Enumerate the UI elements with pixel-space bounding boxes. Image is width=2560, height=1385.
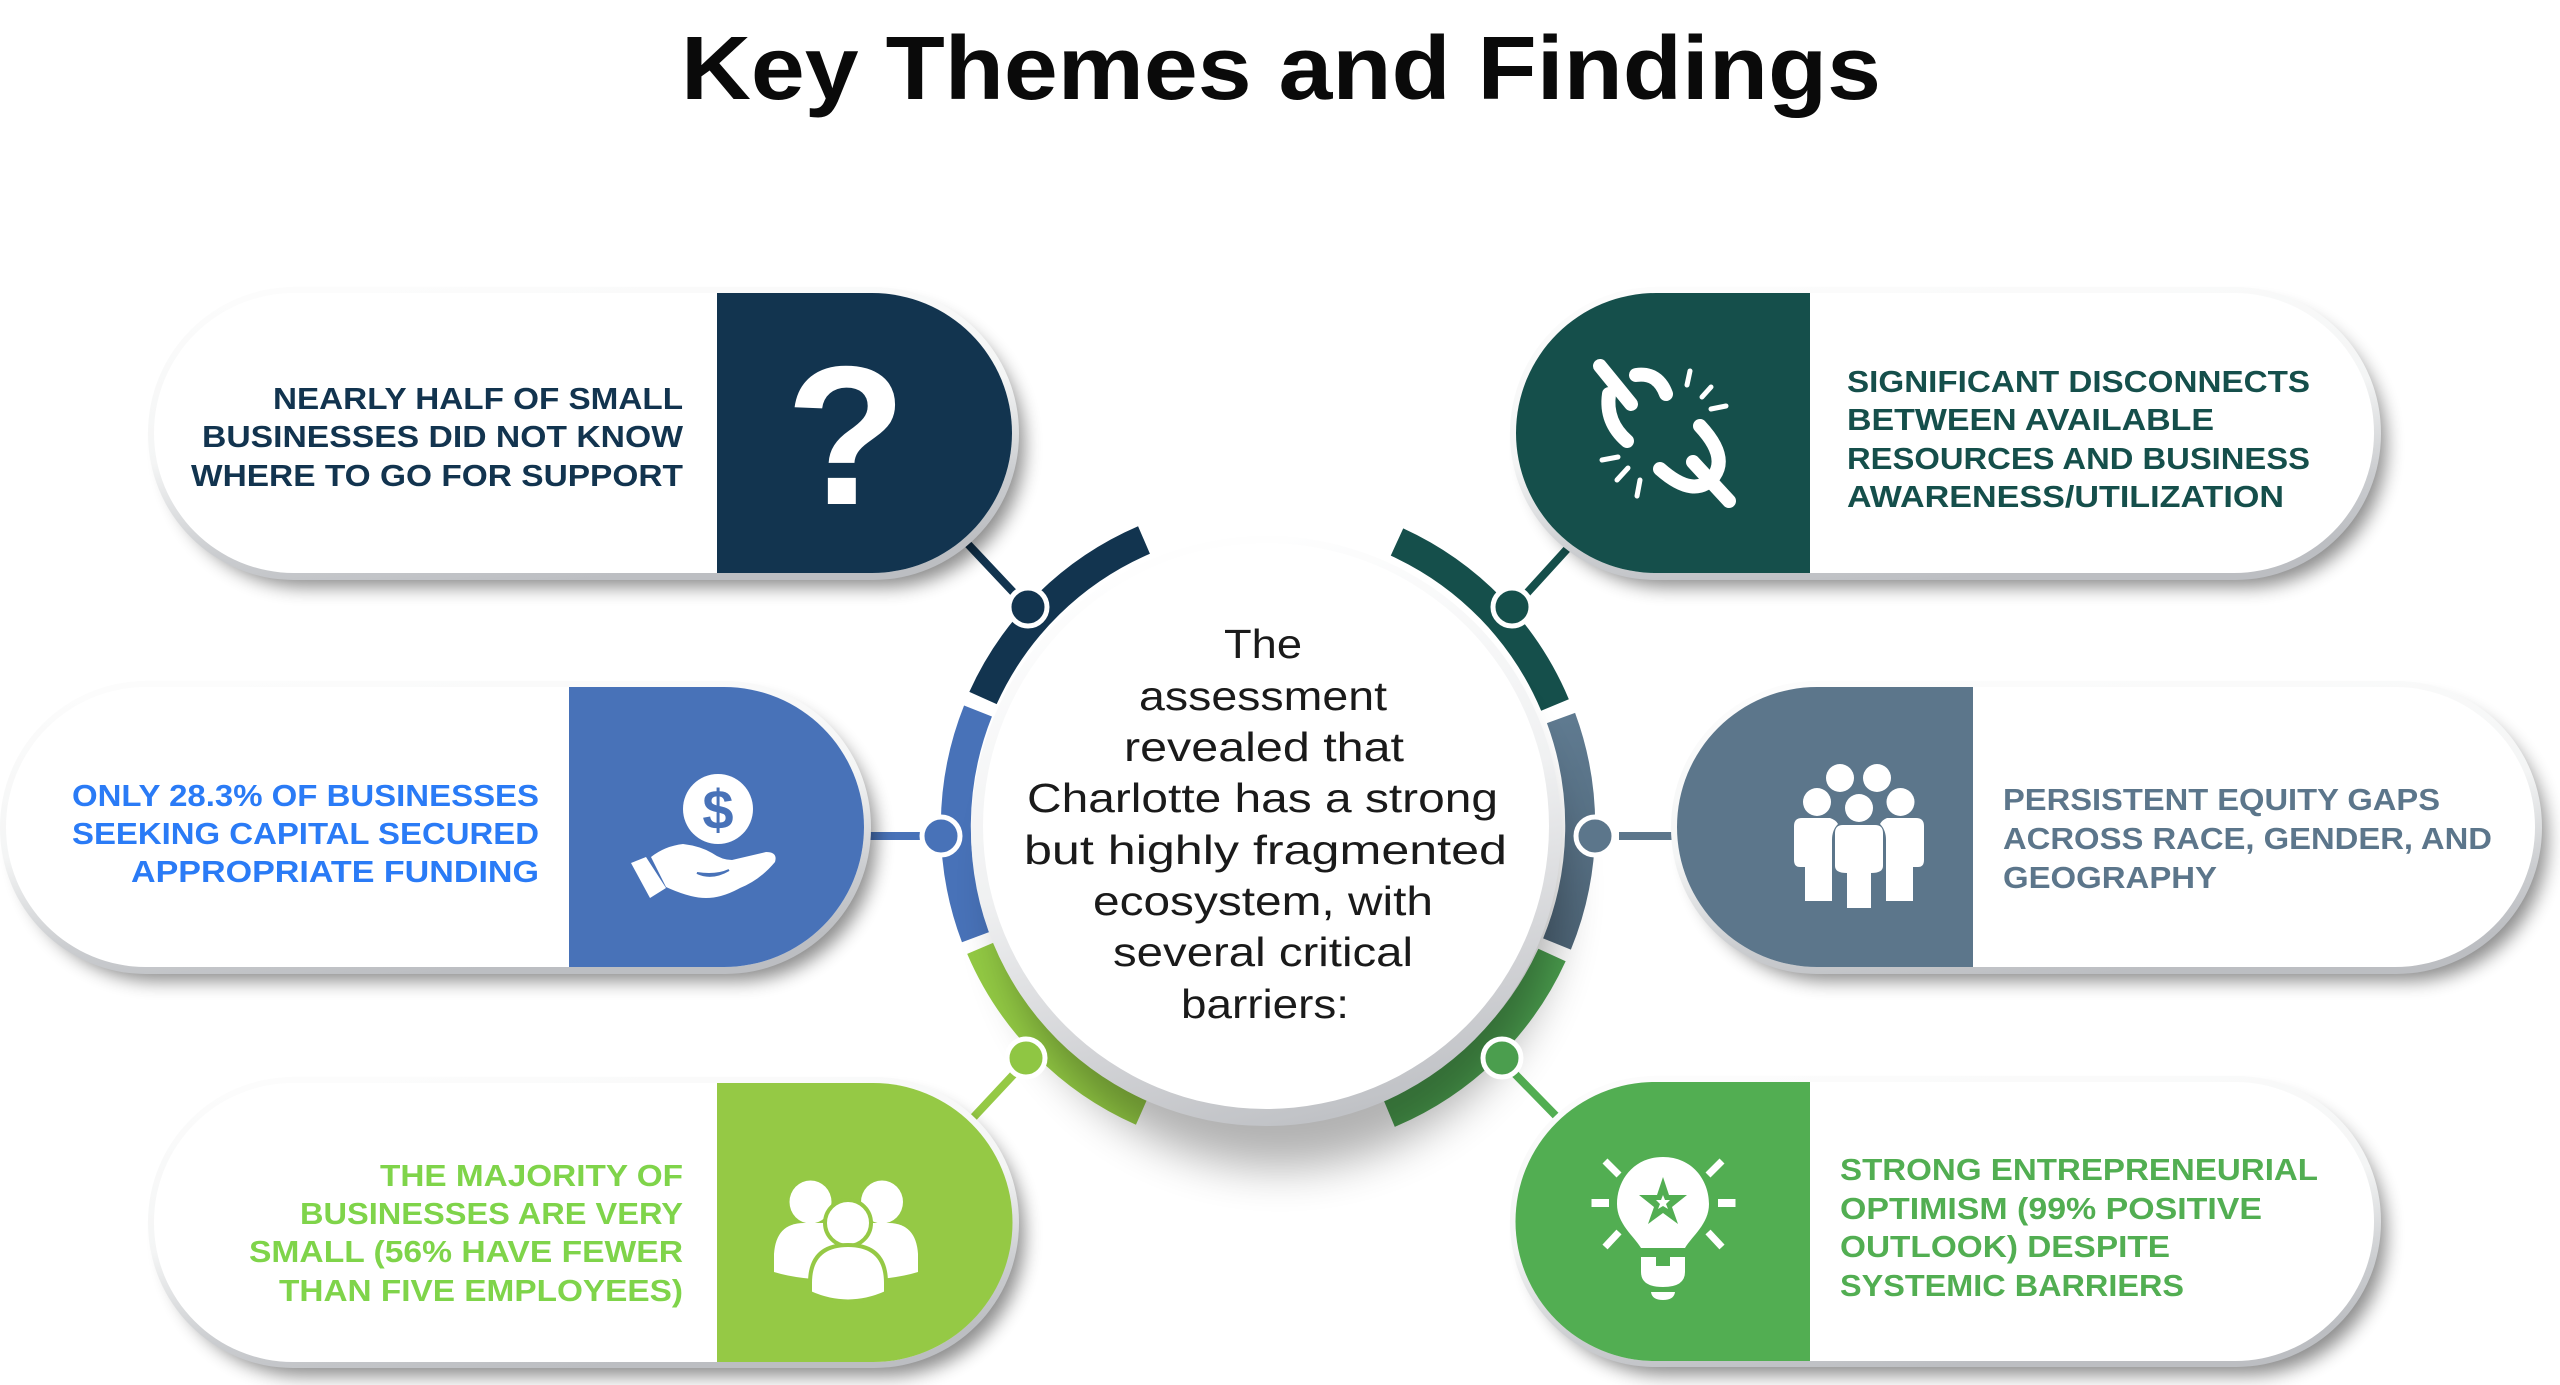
text: optimism: STRONG ENTREPRENEURIAL [1840, 1152, 2318, 1187]
ring nodes [922, 588, 1614, 1077]
text: funding [72, 778, 539, 889]
icon block: navy [717, 293, 1012, 573]
central text: The [1224, 621, 1302, 667]
text: disconnects: SIGNIFICANT DISCONNECTS [1847, 364, 2310, 399]
arc: green [1389, 955, 1552, 1113]
segmented ring around centre [956, 540, 1580, 1113]
icon: light bulb with star [1592, 1157, 1736, 1300]
text: disconnects [1847, 364, 2310, 514]
text: funding: ONLY 28.3% OF BUSINESSES [72, 778, 539, 813]
text: nearly half: BUSINESSES DID NOT KNOW [202, 419, 684, 454]
icon: group of people [1794, 764, 1924, 908]
text: optimism [1840, 1152, 2318, 1303]
text: very small businesses: THE MAJORITY OF [380, 1158, 683, 1193]
arc: navy [983, 540, 1144, 698]
icon block: teal [1516, 293, 1810, 573]
central text: barriers: [1181, 981, 1349, 1027]
icon: three people [774, 1180, 918, 1302]
node: green [1483, 1039, 1521, 1077]
icon: coin in hand [631, 774, 776, 898]
node: blue [922, 817, 960, 855]
text: very small businesses: BUSINESSES ARE VERY [300, 1196, 683, 1231]
icon block: slate [1677, 687, 1973, 967]
connector lines [862, 542, 1680, 1120]
text: very small businesses [249, 1158, 683, 1308]
central text [1024, 621, 1507, 1027]
panel: optimism [1510, 1076, 2386, 1375]
text: equity [2003, 782, 2492, 895]
central text: several critical [1113, 929, 1413, 975]
node: lime [1007, 1039, 1045, 1077]
panel: very small businesses [148, 1077, 1024, 1376]
panel: nearly half [148, 287, 1024, 587]
icon block: green [1516, 1082, 1810, 1361]
text: optimism: OUTLOOK) DESPITE [1840, 1229, 2170, 1264]
arc: lime [981, 948, 1142, 1111]
text: disconnects: AWARENESS/UTILIZATION [1847, 479, 2284, 514]
central text: Charlotte has a strong [1027, 775, 1498, 821]
text: disconnects: RESOURCES AND BUSINESS [1847, 441, 2310, 476]
node: teal [1493, 588, 1531, 626]
icon: broken chain [1600, 366, 1729, 501]
text: equity: ACROSS RACE, GENDER, AND [2003, 821, 2492, 856]
text: equity: GEOGRAPHY [2003, 860, 2217, 895]
panel: disconnects [1510, 287, 2386, 587]
text: funding: APPROPRIATE FUNDING [131, 854, 539, 889]
text: nearly half: WHERE TO GO FOR SUPPORT [191, 458, 683, 493]
text: nearly half [191, 381, 684, 493]
arc: slate [1557, 718, 1580, 944]
central text: but highly fragmented [1024, 827, 1507, 873]
central text: revealed that [1124, 724, 1405, 770]
text: very small businesses: THAN FIVE EMPLOYEES) [279, 1273, 683, 1308]
central circle [971, 536, 1561, 1126]
icon block: lime [717, 1083, 1013, 1362]
text: optimism: OPTIMISM (99% POSITIVE [1840, 1191, 2262, 1226]
text: very small businesses: SMALL (56% HAVE FEWER [249, 1234, 683, 1269]
title: Key Themes and Findings [681, 19, 1881, 119]
arc: blue [956, 711, 978, 937]
text: disconnects: BETWEEN AVAILABLE [1847, 402, 2214, 437]
arc: teal [1397, 542, 1555, 705]
central text: assessment [1139, 673, 1388, 719]
text: optimism: SYSTEMIC BARRIERS [1840, 1268, 2184, 1303]
text: funding: SEEKING CAPITAL SECURED [72, 816, 539, 851]
node: navy [1009, 588, 1047, 626]
icon: question mark: ? [786, 325, 906, 546]
central text: ecosystem, with [1093, 878, 1433, 924]
icon block: blue [569, 687, 864, 967]
central circle shadow [1000, 608, 1560, 1168]
panel: equity [1671, 681, 2547, 981]
panel: funding [0, 681, 876, 981]
text: equity: PERSISTENT EQUITY GAPS [2003, 782, 2440, 817]
node: slate [1576, 817, 1614, 855]
icon: coin in hand: $ [702, 778, 734, 841]
text: nearly half: NEARLY HALF OF SMALL [273, 381, 683, 416]
